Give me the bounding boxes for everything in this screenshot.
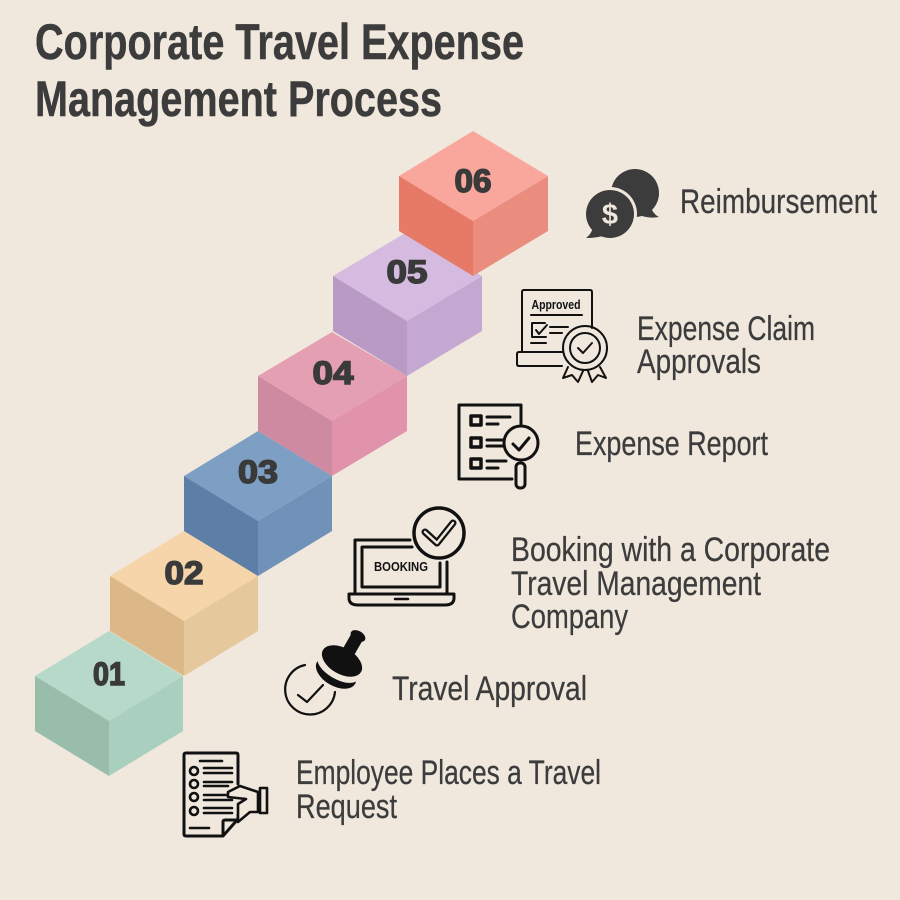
step 05 block: [333, 232, 482, 376]
step 04 block: 04: [312, 355, 354, 391]
icon: reimbursement speech bubbles: $: [602, 199, 618, 231]
step 06 block: [399, 131, 548, 276]
label: booking: Booking with a Corporate: [511, 531, 830, 569]
icon: laptop booking: [349, 508, 464, 605]
label: employee request: Request: [296, 788, 397, 826]
title: Management Process: [35, 71, 442, 127]
step 06 block: 06: [454, 163, 492, 199]
step 04 block: [258, 332, 407, 476]
icon: expense report: [459, 405, 538, 488]
icon: approved certificate: Approved: [532, 297, 581, 312]
label: expense claim approvals: [637, 310, 815, 381]
step 03 block: [184, 431, 332, 576]
icon: laptop booking: BOOKING: [374, 560, 428, 574]
label: travel approval: Travel Approval: [392, 670, 587, 708]
icon: reimbursement speech bubbles: [583, 169, 659, 241]
icon: approved certificate: [517, 290, 607, 382]
step 01 block: [35, 631, 183, 776]
step 01 block: 01: [93, 656, 125, 692]
label: employee request: Employee Places a Travel: [296, 754, 601, 792]
step 03 block: 03: [238, 454, 278, 490]
icon: request document with hand: [184, 753, 267, 836]
label: booking: Travel Management: [511, 565, 761, 603]
label: booking: [511, 531, 830, 636]
label: expense claim approvals: Expense Claim: [637, 310, 815, 348]
label: booking: Company: [511, 598, 628, 636]
step 02 block: [110, 531, 258, 676]
title: Corporate Travel Expense: [35, 14, 524, 70]
step 02 block: 02: [164, 555, 204, 591]
icon: approval stamp: [285, 628, 368, 714]
label: expense claim approvals: Approvals: [637, 343, 761, 381]
title: [35, 14, 524, 127]
label: employee request: [296, 754, 601, 826]
label: expense report: Expense Report: [575, 425, 768, 463]
step 05 block: 05: [386, 254, 428, 290]
